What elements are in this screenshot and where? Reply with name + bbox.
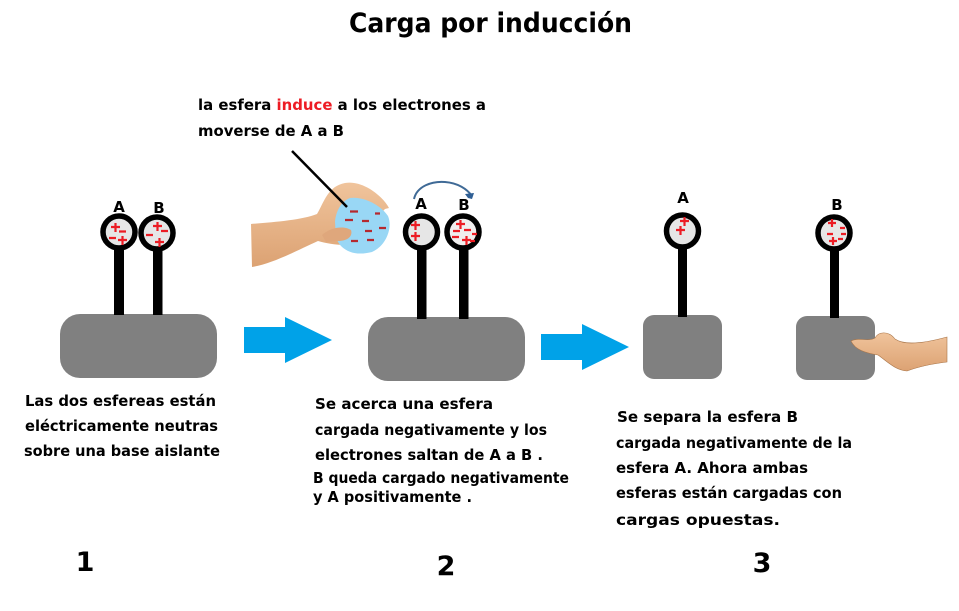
callout text line 2: moverse de A a B: [198, 122, 344, 140]
label B step 3: B: [831, 196, 843, 214]
sphere A step 2: [406, 216, 438, 248]
panel: step 3 sphere B: [796, 196, 875, 380]
base 2: [368, 317, 525, 381]
sphere B step 2: [447, 216, 479, 248]
text: step 2: y A positivamente .: [313, 488, 472, 506]
text: step 1: eléctricamente neutras: [25, 417, 218, 435]
label A step 3: A: [677, 189, 689, 207]
label B: B: [153, 199, 165, 217]
panel: step 3 sphere A: [643, 189, 722, 379]
arrow 2: [541, 324, 629, 370]
label A step 2: A: [415, 195, 427, 213]
panel: step 2: [368, 182, 525, 381]
post A: [678, 245, 687, 317]
posts 1: [114, 245, 162, 315]
sphere A step 1: [103, 216, 135, 248]
callout text: la esfera induce a los electrones a: [198, 96, 486, 114]
text: step 2: B queda cargado negativamente: [313, 469, 569, 487]
text: step 3: [616, 408, 852, 529]
number 1: 1: [76, 547, 94, 578]
text: step 3: esfera A. Ahora ambas: [616, 459, 808, 477]
text: step 2: Se acerca una esfera: [315, 395, 493, 413]
text: step 1: [24, 392, 220, 460]
panel: step 1: [60, 198, 217, 378]
callout line: [292, 151, 347, 207]
icon: hand holding charged sphere: [251, 183, 390, 267]
label A: A: [113, 198, 125, 216]
sphere B step 1: [141, 217, 173, 249]
text: step 3: cargada negativamente de la: [616, 434, 852, 452]
text: step 2: [313, 395, 569, 506]
number 2: 2: [437, 551, 455, 582]
base A: [643, 315, 722, 379]
text: step 1: sobre una base aislante: [24, 442, 220, 460]
arrow 1: [244, 317, 332, 363]
post B: [830, 247, 839, 318]
posts 2: [417, 245, 468, 319]
base 1: [60, 314, 217, 378]
sphere B step 3: [818, 217, 850, 249]
icon: hand: [851, 333, 947, 371]
text: step 1: Las dos esfereas están: [25, 392, 216, 410]
text: step 3: cargas opuestas.: [616, 511, 780, 529]
label B step 2: B: [458, 196, 470, 214]
title: Carga por inducción: [349, 8, 632, 39]
curved arrow: [414, 182, 474, 199]
text: step 3: Se separa la esfera B: [617, 408, 798, 426]
text: step 2: electrones saltan de A a B .: [315, 446, 543, 464]
text: step 3: esferas están cargadas con: [616, 484, 842, 502]
number 3: 3: [753, 548, 771, 579]
sphere A step 3: [666, 215, 698, 247]
base B: [796, 316, 875, 380]
text: step 2: cargada negativamente y los: [315, 421, 547, 439]
